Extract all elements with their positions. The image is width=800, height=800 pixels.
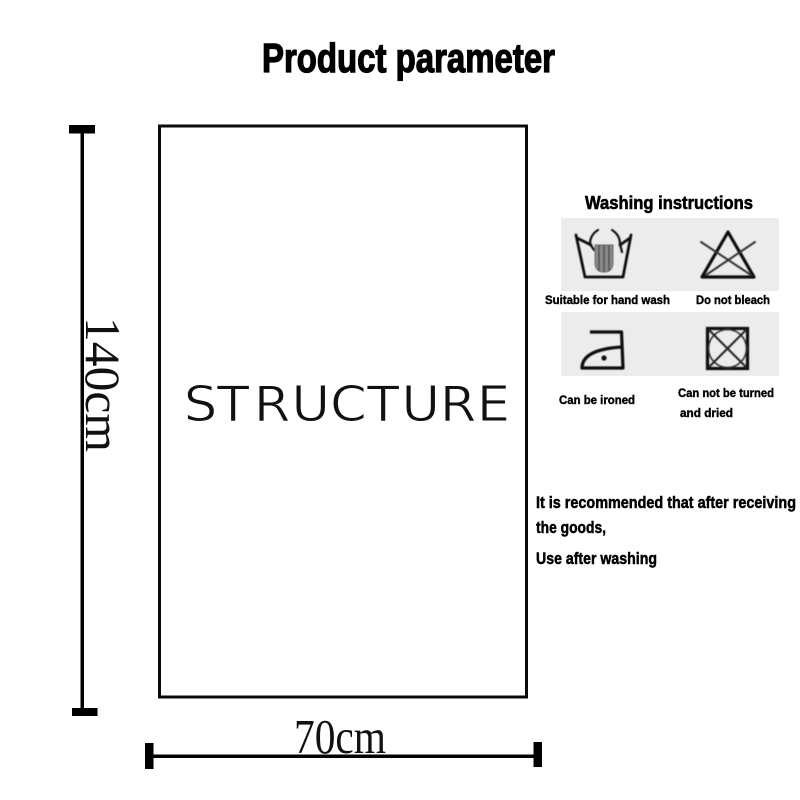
usage recommendation text: the goods, <box>536 519 606 537</box>
icon: do not bleach <box>701 232 755 277</box>
usage recommendation text: Use after washing <box>536 550 657 568</box>
height label: 140cm <box>75 317 131 452</box>
panel: washing icons row 1 <box>561 218 779 291</box>
dimension: height 140cm <box>69 125 131 716</box>
label: do not bleach: Do not bleach <box>696 293 770 307</box>
title: Product parameter <box>262 35 555 81</box>
width label: 70cm <box>294 709 386 764</box>
dimension: width 70cm <box>145 709 542 769</box>
label: hand wash: Suitable for hand wash <box>545 293 670 307</box>
label: can not be tumbled and dried: and dried <box>680 406 733 420</box>
label: can not be tumbled and dried: Can not be turned <box>678 386 774 400</box>
label: can be ironed: Can be ironed <box>559 393 635 407</box>
icon: hand wash <box>576 230 631 277</box>
icon: iron <box>582 332 623 368</box>
panel: washing icons row 2 <box>561 312 779 376</box>
washing instructions heading: Washing instructions <box>585 192 753 213</box>
structure label: STRUCTURE <box>184 377 510 433</box>
label: can not be tumbled and dried <box>678 386 774 420</box>
icon: do not tumble dry <box>708 328 748 368</box>
usage recommendation text <box>536 494 796 568</box>
